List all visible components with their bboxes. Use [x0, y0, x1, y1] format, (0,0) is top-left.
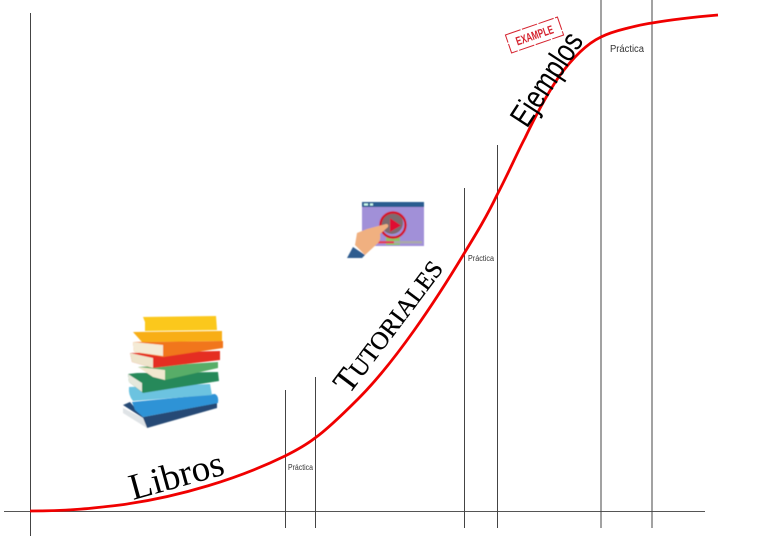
orange book — [133, 341, 223, 357]
practice label 3: Práctica — [610, 44, 644, 55]
navy book — [123, 402, 217, 428]
blue book — [132, 394, 218, 417]
y axis — [30, 13, 32, 536]
light blue book — [129, 384, 212, 401]
presenter — [381, 212, 403, 234]
video window — [362, 202, 424, 246]
icon: example stamp: EXAMPLE — [514, 22, 555, 48]
yellow book — [143, 316, 217, 331]
practice label 1: Práctica — [288, 463, 313, 472]
red book — [130, 351, 220, 368]
progress bar — [378, 241, 422, 244]
amber book — [133, 331, 222, 342]
hand — [355, 224, 388, 255]
practice interval lines: ejemplos — [601, 0, 652, 528]
icon: example stamp — [505, 17, 564, 53]
icon: stack of books — [123, 316, 223, 428]
practice label 2: Práctica — [468, 254, 494, 263]
sleeve — [347, 247, 365, 258]
dark green book — [128, 372, 219, 393]
icon: video tutorial — [347, 202, 424, 258]
label: Tutoriales: TUTORIALES — [327, 252, 450, 400]
practice interval lines: tutoriales — [464, 145, 498, 528]
play button — [380, 212, 406, 238]
label: Libros: Libros — [124, 443, 229, 509]
light green book — [138, 362, 218, 380]
x axis — [4, 510, 705, 512]
label: Ejemplos: Ejemplos — [503, 25, 590, 133]
practice interval lines: libros — [286, 377, 316, 528]
